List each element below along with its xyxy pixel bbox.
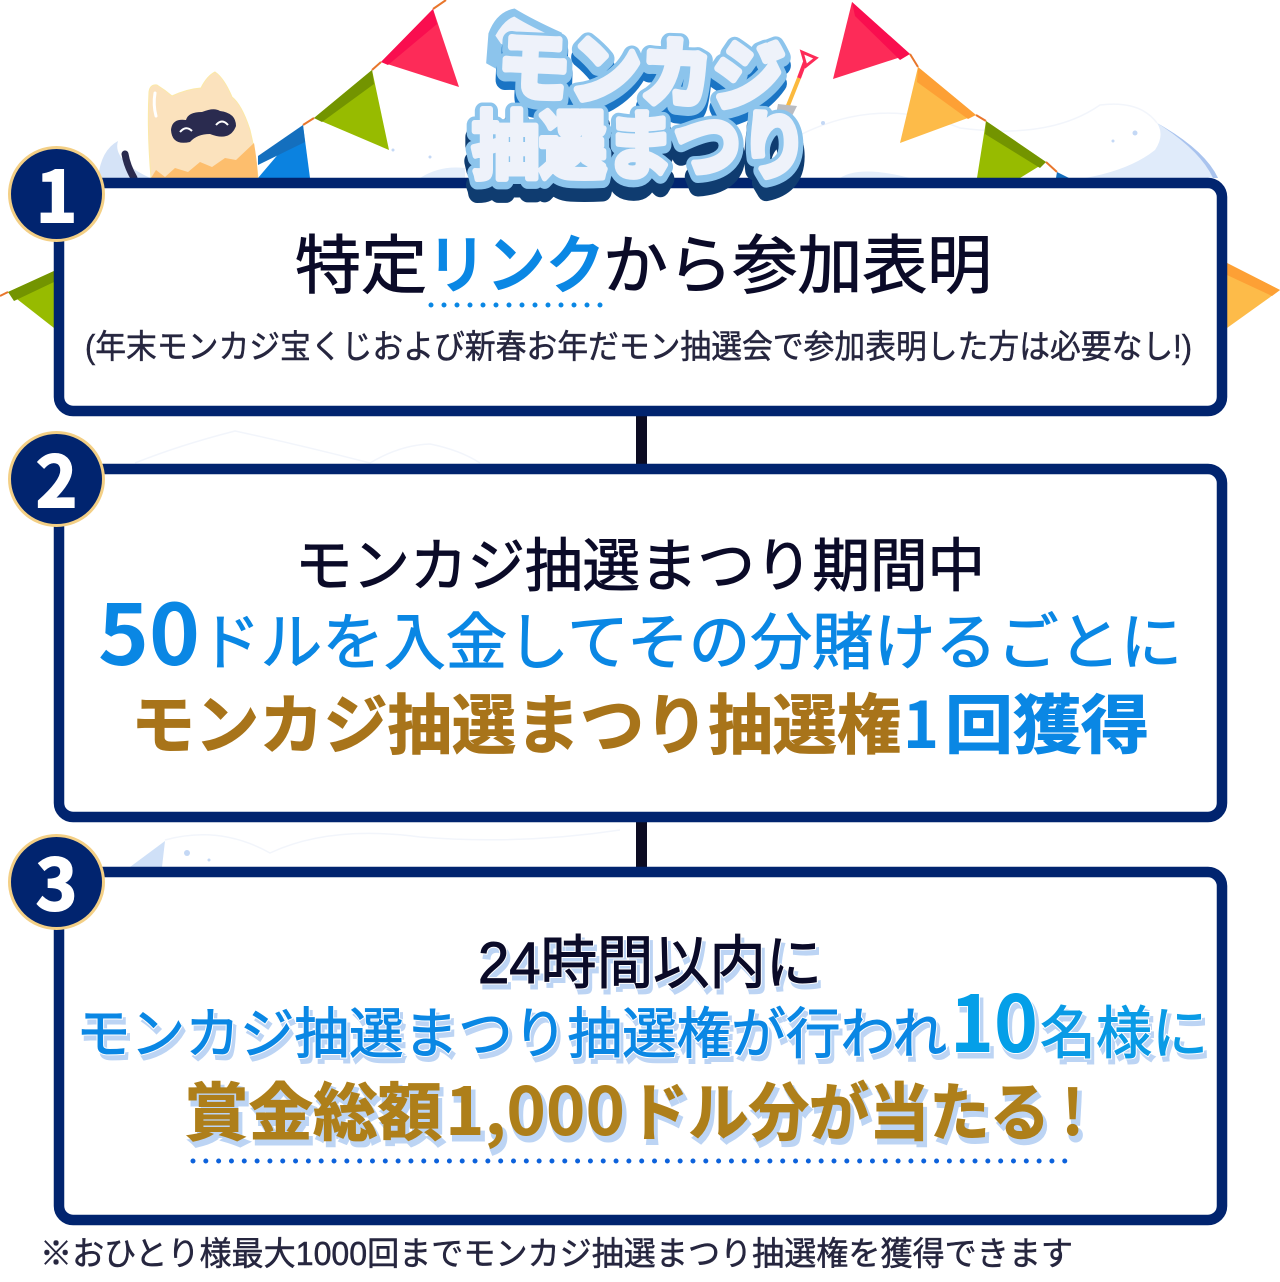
badge 2 [10,427,104,528]
connector 2 to 3 [636,820,647,869]
step 3 line 1: 24時間以内に [478,931,822,996]
step 3 line 2: 名様に [1040,1002,1208,1066]
title line 1: モンカジ [496,36,785,133]
step 3 line 2: モンカジ抽選まつり抽選権が行われ [76,1003,947,1065]
note: step 1: (年末モンカジ宝くじおよび新春お年だモン抽選会で参加表明した方は必要なし!) [85,328,1192,365]
step 3 line 2: モンカジ抽選まつり抽選権が行われ [79,1008,950,1070]
panel: step 2 [59,469,1222,817]
step 3 line 3: ! [1061,1063,1084,1154]
connector 1 to 2 [636,414,647,466]
step 3 line 3: 賞金総額 [184,1079,442,1149]
step 3 line 2: モンカジ抽選まつり抽選権が行われ [76,1003,947,1065]
step 3 line 2: 名様に [1040,1002,1208,1066]
heading: step 1: 特定 [295,230,427,302]
badge 3 [10,830,104,931]
heading: step 1: リンク [427,230,605,302]
snow hills background [98,104,1218,867]
title line 2: 抽選まつり [472,119,808,202]
step 2 line 2 [98,569,1182,690]
step 3 line 3: ! [1064,1068,1087,1159]
step 3 line 1: 24時間以内に [478,931,822,996]
title line 1: モンカジ [496,25,786,122]
title line 1: モンカジ [496,28,785,125]
step 2 line 1: モンカジ抽選まつり期間中 [295,534,985,599]
bunting side flags [0,263,1280,328]
bunting right [833,2,1069,178]
step 2 line 2: ドルを入金してその分賭けるごとに [199,609,1182,678]
step 3 line 2 [76,963,1211,1080]
step 2 line 3: モンカジ抽選まつり抽選権 [131,689,901,762]
dotted underline: prize [193,1158,1069,1164]
icon: mascot cat [125,72,258,178]
step 3 line 3: 1,000 [445,1059,625,1155]
title line 2: 抽選まつり [472,107,808,190]
step 3 line 3: ドル分が当たる [631,1084,1053,1154]
step 3 line 3: ドル分が当たる [628,1079,1050,1149]
step 2 line 3: 回獲得 [945,690,1149,762]
bunting left [258,0,459,178]
footnote: ※おひとり様最大1000回までモンカジ抽選まつり抽選権を獲得できます [40,1235,1073,1272]
badge 1 [10,142,104,243]
step 2 line 2: 50 [98,569,200,690]
step 2 line 3: 1 [903,675,939,767]
step 3 line 2: 10 [950,963,1038,1075]
dotted underline: link [431,302,601,308]
step 3 line 2: 名様に [1043,1007,1211,1071]
step 3 line 1: 24時間以内に [481,936,825,1001]
step 3 line 3: 1,000 [448,1064,628,1160]
step 3 line 3 [184,1059,1087,1160]
step 3 line 3: 賞金総額 [187,1084,445,1154]
title line 2: 抽選まつり [472,105,808,188]
title logo [472,7,808,202]
step 3 line 2: 10 [953,968,1041,1080]
badge 2: 2 [36,427,77,528]
icon: shovel [776,52,816,116]
badge 1: 1 [36,142,77,243]
heading: step 1 [295,230,992,302]
panel: step 3 [59,872,1222,1220]
panel: step 1 [59,183,1222,411]
heading: step 1: から参加表明 [603,230,992,302]
step 2 line 3 [131,675,1149,767]
badge 3: 3 [36,830,77,931]
